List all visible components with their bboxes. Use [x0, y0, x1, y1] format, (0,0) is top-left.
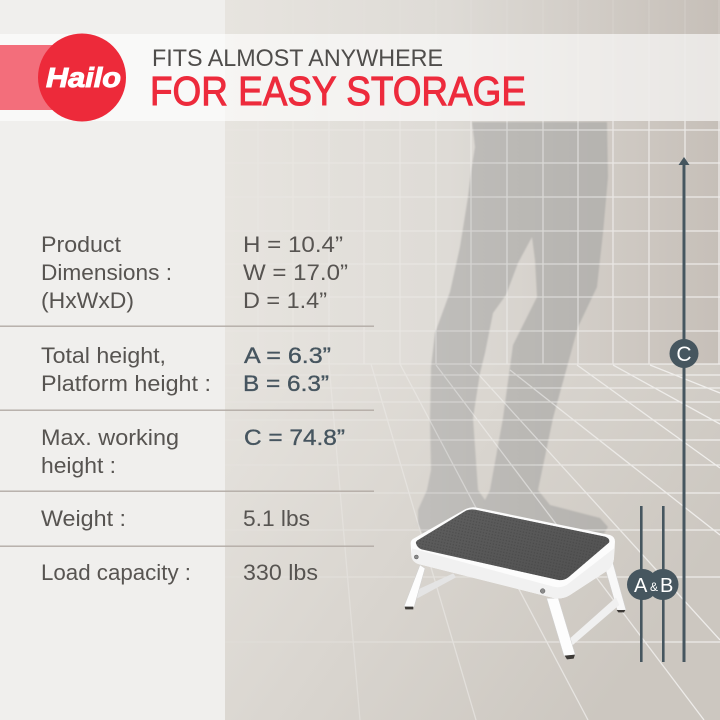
step stool: [404, 507, 626, 659]
heading: [150, 45, 526, 114]
rubber mat: [416, 509, 609, 580]
spec: weight: Weight :: [41, 506, 126, 531]
header logo: [0, 34, 126, 122]
spec: load capacity: [41, 560, 318, 585]
measure lines A and B: &: [650, 580, 658, 594]
spec: product dimensions: (HxWxD): [41, 288, 134, 313]
spec table: [0, 232, 374, 585]
spec: weight: 5.1 lbs: [243, 506, 310, 531]
platform frame: [411, 507, 615, 599]
spec: heights: A = 6.3”: [244, 343, 331, 368]
near legs: [404, 565, 425, 607]
top strip veil: [225, 0, 720, 121]
silhouette of legs: [418, 122, 608, 540]
header band: [0, 34, 720, 121]
tile grid lines: [320, 0, 720, 720]
spec: product dimensions: D = 1.4”: [243, 288, 327, 313]
spec: product dimensions: W = 17.0”: [243, 260, 348, 285]
spec: product dimensions: H = 10.4”: [243, 232, 343, 257]
background: left panel: [0, 0, 225, 720]
spec: max working height: [41, 425, 345, 478]
spec: max working height: height :: [41, 453, 116, 478]
spec: heights: Platform height :: [41, 371, 211, 396]
background: tiled room: [225, 0, 720, 720]
spec: load capacity: Load capacity :: [41, 560, 191, 585]
spec: heights: [41, 343, 331, 396]
spec: max working height: C = 74.8”: [244, 425, 345, 450]
spec: heights: B = 6.3”: [243, 371, 329, 396]
spec: heights: Total height,: [41, 343, 166, 368]
measure lines A and B: [627, 506, 678, 662]
heading: FOR EASY STORAGE: [150, 68, 526, 114]
rivets: [414, 555, 418, 559]
spec: weight: [41, 506, 310, 531]
far side legs and crossbars: [417, 573, 456, 598]
arrow C: [670, 157, 698, 662]
spec: product dimensions: [41, 232, 348, 313]
spec: max working height: Max. working: [41, 425, 179, 450]
measure lines A and B: A: [634, 575, 648, 597]
spec: product dimensions: Dimensions :: [41, 260, 172, 285]
header logo: Hailo: [46, 62, 121, 93]
arrow C: C: [676, 343, 692, 366]
measure lines A and B: B: [660, 575, 673, 597]
spec: product dimensions: Product: [41, 232, 121, 257]
heading: FITS ALMOST ANYWHERE: [152, 45, 443, 72]
spec: load capacity: 330 lbs: [243, 560, 318, 585]
